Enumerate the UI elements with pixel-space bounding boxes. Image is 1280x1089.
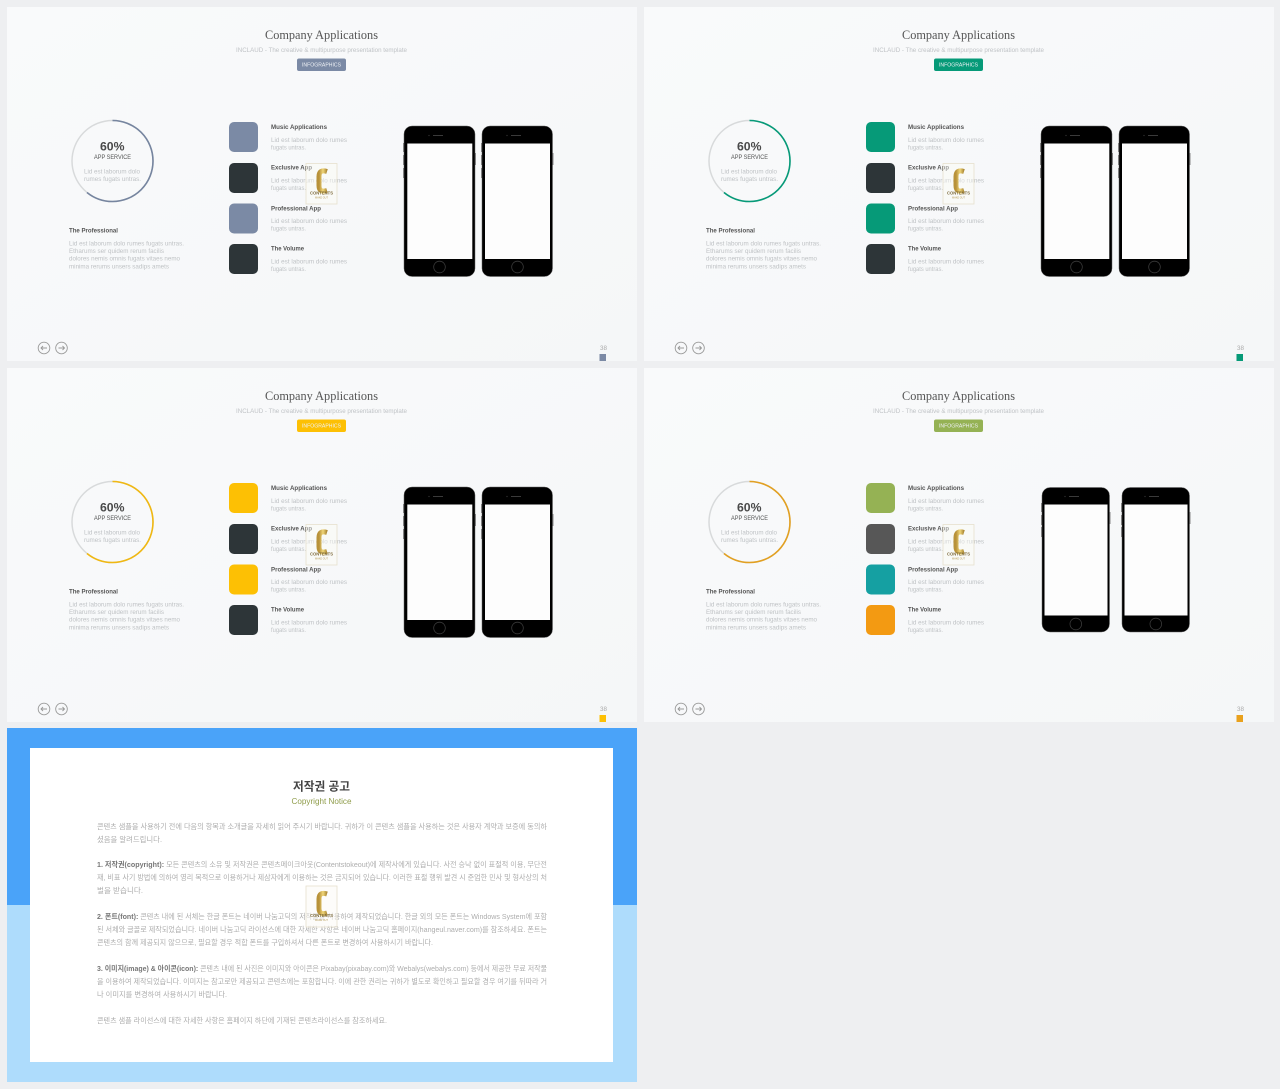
nav arrows <box>675 703 704 715</box>
watermark <box>306 524 337 565</box>
subtitle: INCLAUD - The creative & multipurpose presentation template <box>873 409 1045 415</box>
list item: professional app: fugats untras. <box>908 226 943 232</box>
progress ring: Lid est laborum dolo <box>84 170 141 176</box>
phone right <box>1121 488 1190 632</box>
text block: the professional: minima rerums unsers sadips amets <box>69 264 169 270</box>
list item: the volume <box>866 605 984 635</box>
progress ring: rumes fugats untras. <box>721 538 778 544</box>
badge: INFOGRAPHICS <box>939 62 978 68</box>
title: Company Applications <box>902 27 1015 42</box>
list item: music applications <box>229 483 347 513</box>
progress ring <box>709 120 790 202</box>
list item: exclusive app: fugats untras. <box>908 547 943 553</box>
list item: music applications: fugats untras. <box>908 506 943 512</box>
paragraph: font <box>97 912 547 947</box>
phone right <box>1118 126 1190 276</box>
list item: professional app <box>229 564 347 594</box>
page number: 38 <box>600 346 608 352</box>
badge <box>297 58 346 71</box>
paragraph: font: 된 서체와 글꼴로 제작되었습니다. 네이버 나눔고딕 라이선스에 대한 자세한 사항은 네이버 나눔고딕 홈페이지(hangeul.naver.com)를 참조하세요. 폰트는 <box>97 925 547 934</box>
paragraph: image and icon: 나 이미지를 변경하여 사용하시기 바랍니다. <box>97 990 227 999</box>
watermark: MAKE OUT <box>952 558 965 560</box>
list item: professional app: fugats untras. <box>271 226 306 232</box>
text block: the professional: minima rerums unsers sadips amets <box>706 626 806 632</box>
page number <box>1236 707 1245 722</box>
text block: the professional: dolores nemis omnis fugats vitaes nemo <box>706 256 818 262</box>
list item: music applications: Music Applications <box>908 486 965 492</box>
text block: the professional: Etharums ser quidem rerum facilis <box>69 249 164 255</box>
list item: music applications: Lid est laborum dolo rumes <box>908 138 984 144</box>
list item: exclusive app: fugats untras. <box>271 186 306 192</box>
closing paragraph: 콘텐츠 샘플 라이선스에 대한 자세한 사항은 홈페이지 하단에 기재된 콘텐츠라이선스를 참조하세요. <box>97 1016 387 1025</box>
list item: professional app: Lid est laborum dolo rumes <box>271 580 347 586</box>
list item: the volume: The Volume <box>271 608 305 614</box>
text block: the professional: Etharums ser quidem rerum facilis <box>706 610 801 616</box>
list item: music applications: Lid est laborum dolo rumes <box>271 138 347 144</box>
page number: 38 <box>1237 346 1245 352</box>
list item: exclusive app: Lid est laborum dolo rumes <box>271 178 347 184</box>
phone left <box>1040 126 1113 276</box>
subtitle: INCLAUD - The creative & multipurpose presentation template <box>236 409 408 415</box>
watermark: CONTENTS <box>310 190 333 196</box>
progress ring: APP SERVICE <box>94 155 131 161</box>
badge <box>934 58 983 71</box>
progress ring <box>72 482 153 562</box>
list item: music applications <box>866 483 984 513</box>
paragraph: copyright: 재, 비표 사기 방법에 의하여 영리 목적으로 이용하거나 제삼자에게 이용하는 것은 금지되어 있습니다. 이러한 표절 행위 발견 시 준엄한 민사 및 형사상의 처 <box>97 873 547 882</box>
list item: music applications: fugats untras. <box>271 506 306 512</box>
list item: exclusive app: Exclusive App <box>271 526 312 532</box>
progress ring: 60% <box>100 140 125 154</box>
intro paragraph: 콘텐츠 샘플을 사용하기 전에 다음의 항목과 소개글을 자세히 읽어 주시기 바랍니다. 귀하가 이 콘텐츠 샘플을 사용하는 것은 사용자 계약과 보증에 동의하 <box>97 822 547 831</box>
list item: music applications: Lid est laborum dolo rumes <box>271 499 347 505</box>
list item: the volume: fugats untras. <box>908 267 943 273</box>
subtitle: INCLAUD - The creative & multipurpose presentation template <box>236 48 408 54</box>
progress ring: rumes fugats untras. <box>721 177 778 183</box>
list item: exclusive app: fugats untras. <box>908 186 943 192</box>
progress ring: APP SERVICE <box>731 516 768 522</box>
list item: the volume: The Volume <box>271 246 305 252</box>
text block: the professional: dolores nemis omnis fugats vitaes nemo <box>706 618 818 624</box>
phone right <box>481 487 554 638</box>
paragraph: copyright: 1. 저작권(copyright): 모든 콘텐츠의 소유 및 저작권은 콘텐츠메이크아웃(Contentstokeout)에 제작사에게 있습니다. 사전 승낙 없이 표절적 이용, 무단전 <box>97 860 547 869</box>
text block: the professional: The Professional <box>706 228 755 234</box>
text block: the professional: The Professional <box>69 590 118 596</box>
progress ring: Lid est laborum dolo <box>721 530 778 536</box>
text block: the professional <box>69 228 184 270</box>
progress ring: Lid est laborum dolo <box>84 530 141 536</box>
text block: the professional: dolores nemis omnis fugats vitaes nemo <box>69 618 181 624</box>
list item: music applications: Lid est laborum dolo rumes <box>908 499 984 505</box>
list item: music applications: fugats untras. <box>271 146 306 152</box>
list item: professional app: Lid est laborum dolo rumes <box>271 219 347 225</box>
list item: professional app: Professional App <box>271 568 321 574</box>
list item: the volume: Lid est laborum dolo rumes <box>271 620 347 626</box>
intro paragraph: 셨음을 알려드립니다. <box>97 835 162 844</box>
list item: exclusive app: Exclusive App <box>908 526 949 532</box>
phone right <box>481 126 554 276</box>
copyright subheading: Copyright Notice <box>292 797 352 806</box>
paragraph: image and icon <box>97 964 547 999</box>
progress ring <box>72 120 153 202</box>
badge: INFOGRAPHICS <box>939 424 978 430</box>
list item: the volume: The Volume <box>908 608 942 614</box>
page number <box>600 707 608 722</box>
page number: 38 <box>600 707 608 713</box>
list item: the volume <box>229 605 347 635</box>
panel: slide 3 yellow <box>7 368 637 722</box>
progress ring: APP SERVICE <box>94 516 131 522</box>
panel: slide 4 multicolour <box>644 368 1274 722</box>
page number <box>1236 346 1245 361</box>
text block: the professional: Etharums ser quidem rerum facilis <box>706 249 801 255</box>
list item: exclusive app <box>866 524 984 554</box>
list item: music applications <box>866 122 984 152</box>
progress ring: rumes fugats untras. <box>84 538 141 544</box>
watermark: MAKE OUT <box>952 196 965 200</box>
progress ring <box>709 482 790 562</box>
list item: professional app <box>229 204 347 234</box>
watermark: CONTENTS <box>947 552 970 556</box>
watermark <box>943 164 974 204</box>
page number: 38 <box>1237 707 1245 713</box>
list item: professional app <box>866 204 984 234</box>
intro paragraph <box>97 822 547 844</box>
watermark <box>306 886 337 927</box>
text block: the professional: Lid est laborum dolo rumes fugats untras. <box>69 242 184 248</box>
paragraph: copyright: 벌을 받습니다. <box>97 886 143 895</box>
paragraph: font: 콘텐츠의 함께 제공되지 않으므로, 필요할 경우 적합 폰트를 구입하셔서 다른 폰트로 변경하여 사용하시기 바랍니다. <box>97 938 433 947</box>
list item: professional app: fugats untras. <box>271 588 306 594</box>
watermark: MAKE OUT <box>315 196 328 200</box>
list item: professional app: Professional App <box>908 206 958 212</box>
text block: the professional: Lid est laborum dolo rumes fugats untras. <box>69 602 184 608</box>
paragraph: image and icon: 3. 이미지(image) & 아이콘(icon): 콘텐츠 내에 된 사진은 이미지와 아이콘은 Pixabay(pixabay.com)와 Webalys(webalys.com) 등에서 제공한 무료 저작물 <box>97 964 547 973</box>
list item: the volume: fugats untras. <box>271 628 306 634</box>
watermark: CONTENTS <box>310 913 333 918</box>
progress ring: rumes fugats untras. <box>84 177 141 183</box>
list item: the volume <box>229 244 347 274</box>
list item: exclusive app: Exclusive App <box>271 166 312 172</box>
watermark: MAKE OUT <box>315 558 328 560</box>
panel: slide 2 green <box>644 7 1274 361</box>
phone left <box>403 487 476 638</box>
subtitle: INCLAUD - The creative & multipurpose presentation template <box>873 48 1045 54</box>
nav arrows <box>38 342 67 354</box>
watermark <box>943 524 974 565</box>
paragraph: image and icon: 을 이용하여 제작되었습니다. 이미지는 참고로만 제공되고 콘텐츠에는 포함합니다. 이에 관한 권리는 귀하가 별도로 확인하고 필요할 경우 여기를 뒤따라 거 <box>97 977 547 986</box>
panel: copyright notice <box>7 728 637 1082</box>
badge: INFOGRAPHICS <box>302 424 341 430</box>
list item: exclusive app <box>229 163 347 193</box>
list item: music applications: Music Applications <box>908 125 965 131</box>
watermark: MAKE OUT <box>315 919 328 922</box>
watermark <box>306 164 337 204</box>
list item: the volume: The Volume <box>908 246 942 252</box>
progress ring: 60% <box>100 500 125 514</box>
watermark: CONTENTS <box>310 552 333 556</box>
phone left <box>1041 488 1110 632</box>
badge: INFOGRAPHICS <box>302 62 341 68</box>
text block: the professional: dolores nemis omnis fugats vitaes nemo <box>69 256 181 262</box>
list item: music applications <box>229 122 347 152</box>
list item: the volume: Lid est laborum dolo rumes <box>908 260 984 266</box>
title: Company Applications <box>265 27 378 42</box>
text block: the professional: Lid est laborum dolo rumes fugats untras. <box>706 242 821 248</box>
list item: the volume: Lid est laborum dolo rumes <box>908 620 984 626</box>
list item: exclusive app <box>229 524 347 554</box>
text block: the professional: The Professional <box>69 228 118 234</box>
text block: the professional: The Professional <box>706 590 755 596</box>
text block: the professional: Lid est laborum dolo rumes fugats untras. <box>706 602 821 608</box>
list item: professional app <box>866 564 984 594</box>
phone left <box>403 126 476 276</box>
copyright heading: 저작권 공고 <box>293 778 350 794</box>
list item: the volume: fugats untras. <box>271 267 306 273</box>
panel: slide 1 slate <box>7 7 637 361</box>
list item: exclusive app: Lid est laborum dolo rumes <box>908 178 984 184</box>
list item: professional app: Professional App <box>908 568 958 574</box>
list item: professional app: Lid est laborum dolo rumes <box>908 580 984 586</box>
nav arrows <box>38 703 67 715</box>
list item: music applications: fugats untras. <box>908 146 943 152</box>
list item: professional app: Lid est laborum dolo rumes <box>908 219 984 225</box>
title: Company Applications <box>265 388 378 403</box>
progress ring: APP SERVICE <box>731 155 768 161</box>
list item: the volume: fugats untras. <box>908 628 943 634</box>
progress ring: 60% <box>737 140 762 154</box>
list item: music applications: Music Applications <box>271 125 328 131</box>
list item: the volume <box>866 244 984 274</box>
list item: exclusive app: fugats untras. <box>271 547 306 553</box>
nav arrows <box>675 342 704 354</box>
title: Company Applications <box>902 388 1015 403</box>
list item: professional app: fugats untras. <box>908 588 943 594</box>
list item: the volume: Lid est laborum dolo rumes <box>271 260 347 266</box>
paragraph: font: 2. 폰트(font): 콘텐츠 내에 된 서체는 한글 폰트는 네이버 나눔고딕의 저작물을 사용하여 제작되었습니다. 한글 외의 모든 폰트는 Windows System에 포함 <box>97 912 547 921</box>
text block: the professional <box>706 590 821 632</box>
page number <box>600 346 608 361</box>
list item: exclusive app: Lid est laborum dolo rumes <box>908 540 984 546</box>
text block: the professional: Etharums ser quidem rerum facilis <box>69 610 164 616</box>
list item: exclusive app <box>866 163 984 193</box>
progress ring: Lid est laborum dolo <box>721 170 778 176</box>
text block: the professional <box>706 228 821 270</box>
watermark: CONTENTS <box>947 190 970 196</box>
text block: the professional: minima rerums unsers sadips amets <box>69 626 169 632</box>
text block: the professional <box>69 590 184 632</box>
paragraph: copyright <box>97 860 547 895</box>
list item: professional app: Professional App <box>271 206 321 212</box>
list item: music applications: Music Applications <box>271 486 328 492</box>
badge <box>297 420 346 432</box>
list item: exclusive app: Lid est laborum dolo rumes <box>271 540 347 546</box>
progress ring: 60% <box>737 500 762 514</box>
list item: exclusive app: Exclusive App <box>908 166 949 172</box>
badge <box>934 420 983 432</box>
text block: the professional: minima rerums unsers sadips amets <box>706 264 806 270</box>
